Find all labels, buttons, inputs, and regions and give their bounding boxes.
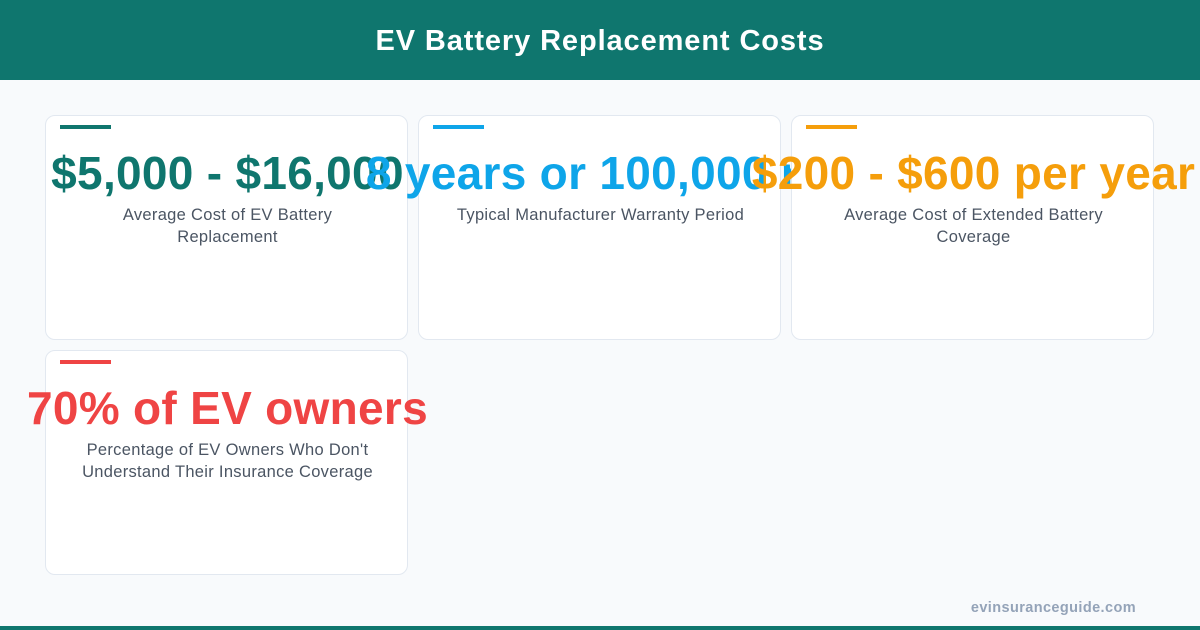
stat label: Average Cost of Extended Battery Coverage — [844, 206, 1103, 246]
stat label: Percentage of EV Owners Who Don't Understand Their Insurance Coverage — [82, 441, 373, 481]
accent bar — [60, 360, 111, 364]
accent bar — [806, 125, 857, 129]
footer source: evinsuranceguide.com — [971, 600, 1136, 616]
card: owners understanding — [45, 350, 408, 575]
card: battery replacement cost — [45, 115, 408, 340]
stat value: $200 - $600 per year — [752, 147, 1195, 199]
accent bar — [60, 125, 111, 129]
stat value: 8 years or 100,000 mi — [366, 147, 835, 199]
stat label: Typical Manufacturer Warranty Period — [457, 206, 744, 224]
card: extended coverage cost — [791, 115, 1154, 340]
stat value: 70% of EV owners — [27, 382, 428, 434]
stat value: $5,000 - $16,000 — [51, 147, 404, 199]
title: EV Battery Replacement Costs — [375, 25, 825, 57]
accent bar — [433, 125, 484, 129]
stat label: Average Cost of EV Battery Replacement — [123, 206, 332, 246]
title — [0, 0, 1200, 80]
card: warranty period — [418, 115, 781, 340]
